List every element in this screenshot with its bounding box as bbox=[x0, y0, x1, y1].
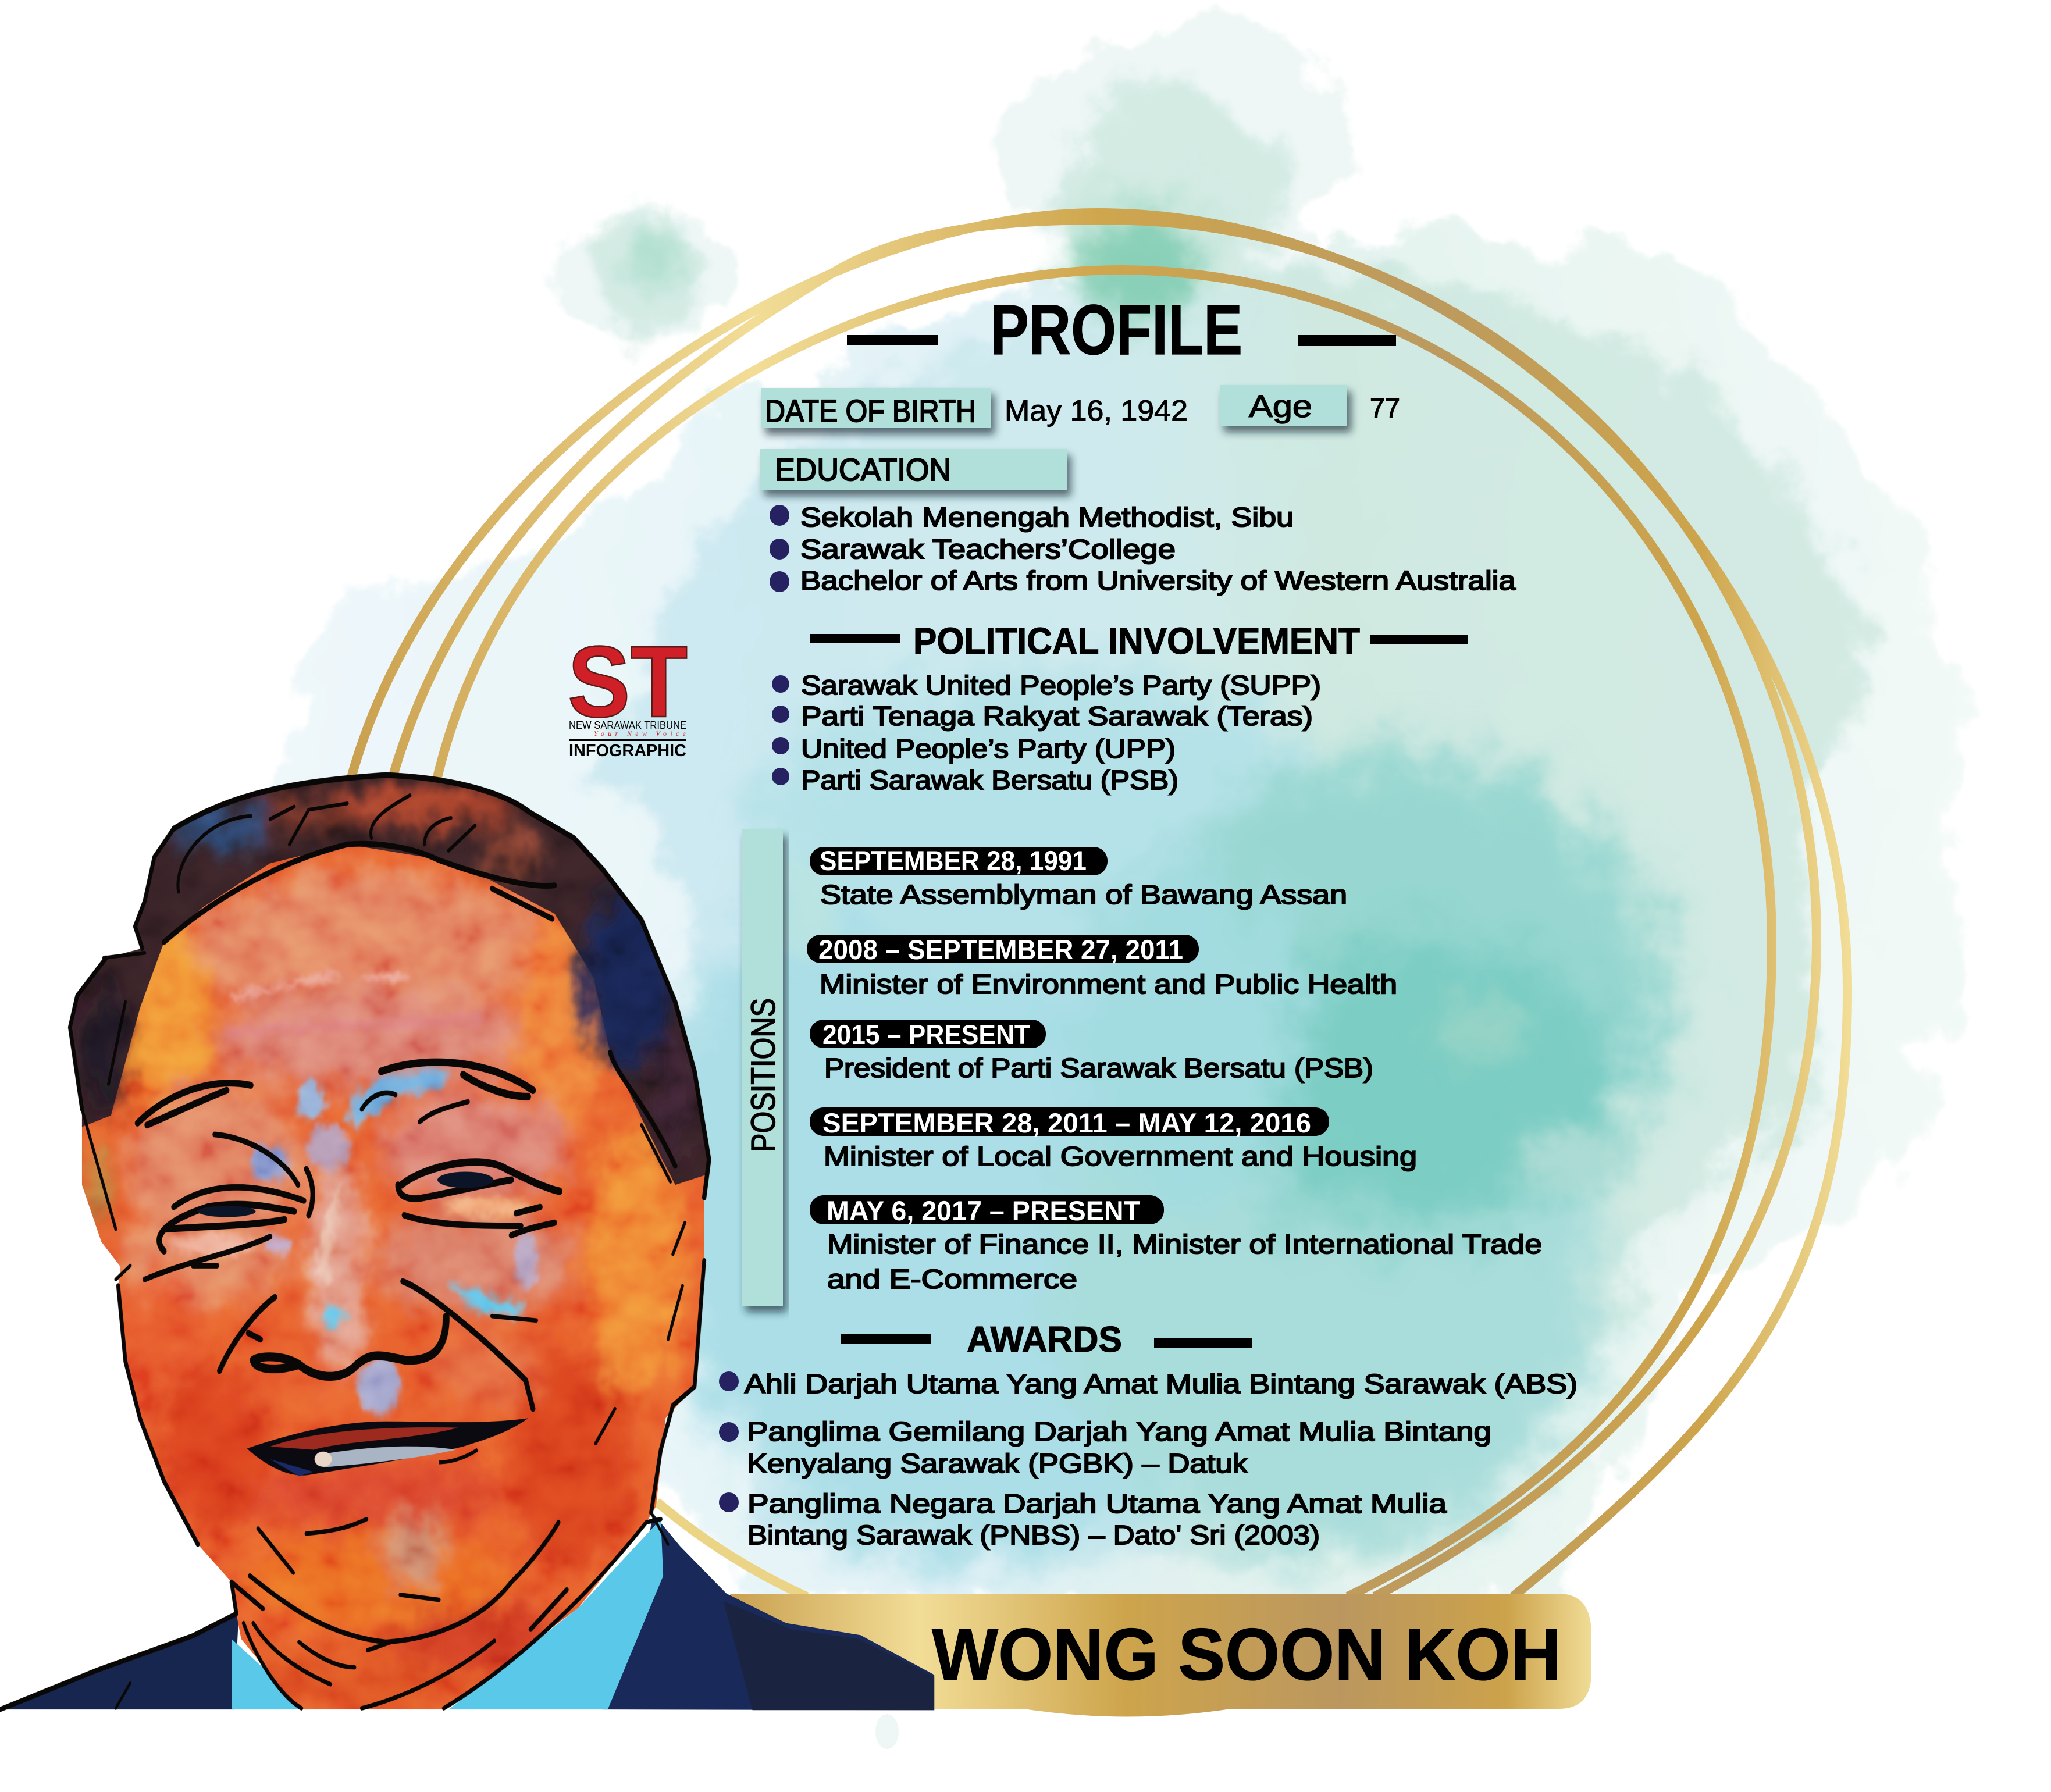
education: Sekolah Menengah Methodist, Sibu bbox=[800, 502, 1294, 532]
date of birth bbox=[761, 388, 1188, 429]
awards bbox=[719, 1320, 1578, 1550]
positions timeline: 2015 – PRESENT bbox=[822, 1019, 1030, 1050]
name: WONG SOON KOH bbox=[932, 1613, 1561, 1695]
paint texture bbox=[63, 769, 719, 1715]
political involvement: Parti Tenaga Rakyat Sarawak (Teras) bbox=[801, 701, 1313, 731]
political involvement bbox=[772, 620, 1468, 795]
awards: Panglima Negara Darjah Utama Yang Amat Mulia bbox=[747, 1488, 1447, 1519]
watercolor background bbox=[279, 32, 1966, 1749]
nose bbox=[219, 1297, 275, 1371]
eyes dark bbox=[198, 1171, 493, 1217]
logo: New Sarawak Tribune: INFOGRAPHIC bbox=[569, 742, 686, 760]
logo: New Sarawak Tribune: NEW SARAWAK TRIBUNE bbox=[569, 719, 686, 731]
face colour patches bbox=[63, 769, 719, 1715]
age bbox=[1220, 385, 1400, 426]
gold name banner bbox=[730, 1594, 1591, 1717]
right eye bbox=[401, 1162, 560, 1191]
positions timeline: Minister of Local Government and Housing bbox=[824, 1141, 1417, 1171]
positions timeline: MAY 6, 2017 – PRESENT bbox=[827, 1195, 1140, 1226]
political involvement: Parti Sarawak Bersatu (PSB) bbox=[801, 765, 1178, 795]
heading: profile: PROFILE bbox=[990, 290, 1242, 369]
positions side bar bbox=[742, 829, 783, 1306]
logo: New Sarawak Tribune: Your New Voice bbox=[594, 729, 686, 738]
mouth bbox=[247, 1418, 528, 1476]
education: Bachelor of Arts from University of Western Australia bbox=[800, 565, 1516, 596]
awards: AWARDS bbox=[967, 1320, 1122, 1360]
positions timeline: SEPTEMBER 28, 2011 – MAY 12, 2016 bbox=[822, 1107, 1311, 1138]
positions timeline: President of Parti Sarawak Bersatu (PSB) bbox=[824, 1053, 1373, 1083]
education: EDUCATION bbox=[775, 453, 951, 487]
jacket bbox=[0, 1513, 934, 1710]
age: 77 bbox=[1370, 393, 1400, 424]
chin and jaw bbox=[258, 1519, 439, 1600]
education bbox=[760, 449, 1516, 596]
positions timeline: Minister of Environment and Public Health bbox=[820, 969, 1397, 999]
portrait bbox=[0, 769, 934, 1715]
date of birth: DATE OF BIRTH bbox=[765, 394, 976, 429]
age: Age bbox=[1249, 389, 1312, 424]
positions timeline: State Assemblyman of Bawang Assan bbox=[820, 879, 1347, 910]
political involvement: United People’s Party (UPP) bbox=[801, 733, 1176, 764]
education: Sarawak Teachers’College bbox=[800, 534, 1176, 564]
date of birth: May 16, 1942 bbox=[1005, 394, 1188, 427]
gold rings bbox=[351, 213, 1847, 1597]
positions timeline: Minister of Finance II, Minister of International Trade bbox=[827, 1229, 1542, 1259]
heading: profile bbox=[847, 290, 1396, 369]
positions timeline: SEPTEMBER 28, 1991 bbox=[820, 845, 1087, 876]
political involvement: POLITICAL INVOLVEMENT bbox=[913, 620, 1360, 662]
right eyebrow bbox=[381, 1062, 533, 1096]
awards: Ahli Darjah Utama Yang Amat Mulia Bintang Sarawak (ABS) bbox=[745, 1369, 1578, 1399]
positions timeline: and E-Commerce bbox=[827, 1264, 1077, 1294]
awards: Panglima Gemilang Darjah Yang Amat Mulia Bintang bbox=[747, 1416, 1491, 1447]
hair bbox=[63, 769, 714, 1223]
political involvement: Sarawak United People’s Party (SUPP) bbox=[801, 670, 1321, 700]
awards: Bintang Sarawak (PNBS) – Dato' Sri (2003) bbox=[747, 1520, 1320, 1550]
positions side bar: POSITIONS bbox=[745, 998, 782, 1152]
positions timeline bbox=[807, 845, 1542, 1294]
head outline bbox=[174, 775, 709, 1198]
left eyebrow bbox=[137, 1083, 251, 1125]
face ink lines bbox=[0, 775, 709, 1709]
positions timeline: 2008 – SEPTEMBER 27, 2011 bbox=[818, 934, 1183, 965]
left eye bbox=[215, 1134, 298, 1185]
logo: New Sarawak Tribune: ST bbox=[568, 625, 688, 738]
awards: Kenyalang Sarawak (PGBK) – Datuk bbox=[747, 1448, 1248, 1479]
shirt bbox=[232, 1519, 663, 1709]
